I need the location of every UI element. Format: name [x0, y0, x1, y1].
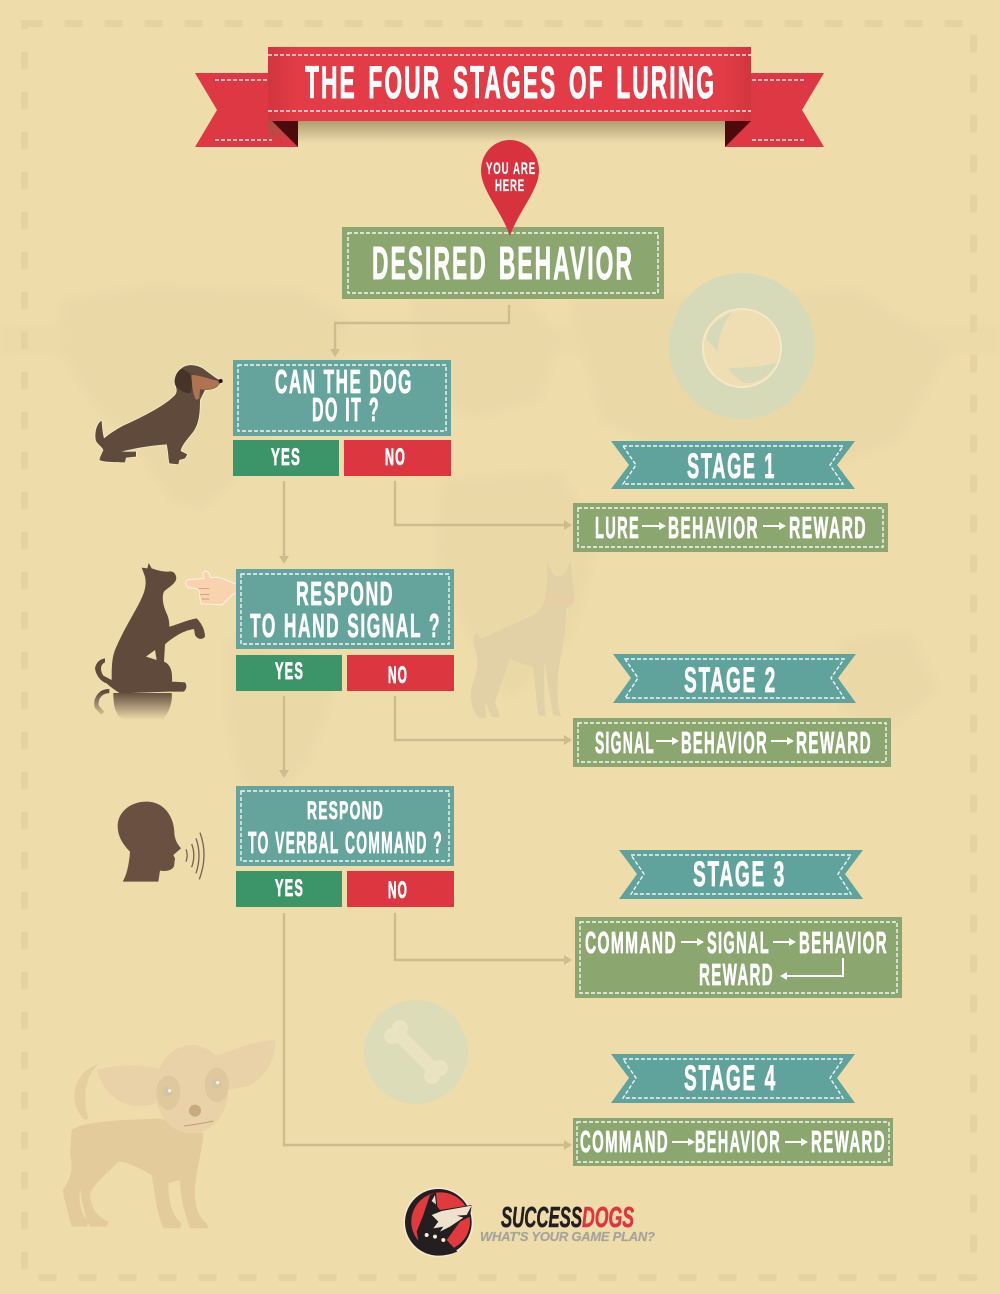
background world map [0, 285, 1000, 800]
yes button 2 [236, 655, 342, 691]
arrow: yes to question 3 [279, 696, 289, 778]
question box 2: RESPOND [296, 575, 394, 612]
logo wordmark: DOGS [582, 1202, 634, 1234]
logo wordmark: SUCCESS [501, 1202, 582, 1234]
icon: speaking head [118, 802, 204, 882]
stage 3 sequence box: BEHAVIOR [799, 925, 888, 960]
arrow: yes to question 2 [279, 481, 289, 564]
desired behavior box: DESIRED BEHAVIOR [372, 237, 634, 289]
question box 1: CAN THE DOG [275, 363, 413, 400]
yes button 3: YES [275, 875, 304, 902]
stage 2 sequence box [573, 718, 891, 767]
stage 3 ribbon [619, 850, 863, 899]
stage 2 sequence box: SIGNAL [595, 725, 655, 760]
question box 3: RESPOND [307, 797, 384, 825]
stage 4 sequence box: BEHAVIOR [695, 1124, 781, 1159]
stage 1 sequence box [573, 503, 888, 552]
location pin: you are here: YOU ARE [486, 159, 536, 178]
background doberman silhouette [471, 561, 575, 718]
question box 2 [236, 569, 454, 649]
arrow: no to stage 2 [395, 696, 572, 745]
stage 3 ribbon: STAGE 3 [693, 855, 786, 894]
logo wordmark [480, 1202, 655, 1244]
stage 3 sequence box: REWARD [699, 957, 774, 992]
stage 1 ribbon: STAGE 1 [687, 447, 776, 486]
no button 3: NO [388, 877, 408, 904]
logo mark: wolf in circle [403, 1187, 473, 1257]
arrow: no to stage 1 [395, 481, 572, 530]
stage 3 sequence box [575, 917, 902, 998]
location pin: you are here: HERE [495, 176, 525, 195]
arrow: yes to stage 4 [284, 913, 572, 1150]
no button 2 [347, 655, 454, 691]
stage 3 sequence box: SIGNAL [707, 925, 770, 960]
stage 4 ribbon: STAGE 4 [684, 1059, 777, 1098]
yes button 2: YES [275, 658, 304, 685]
location pin: you are here [481, 140, 539, 236]
icon: sitting dog [95, 563, 205, 720]
stage 4 sequence box: REWARD [811, 1124, 886, 1159]
question box 1 [233, 360, 451, 436]
stage 2 sequence box: REWARD [796, 725, 872, 760]
stage 2 ribbon: STAGE 2 [684, 661, 777, 700]
no button 2: NO [388, 662, 408, 689]
question box 3 [236, 786, 454, 866]
stage 1 sequence box: LURE [595, 510, 640, 545]
stage 1 sequence box: BEHAVIOR [668, 510, 759, 545]
no button 1 [344, 440, 451, 476]
icon: dachshund [95, 365, 223, 464]
question box 2: TO HAND SIGNAL ? [250, 607, 441, 644]
icon: pointing hand [186, 572, 236, 604]
question box 1: DO IT ? [312, 391, 380, 428]
stage 4 ribbon [611, 1054, 855, 1103]
yes button 1 [233, 440, 339, 476]
stage 4 sequence box [573, 1118, 893, 1166]
no button 3 [347, 871, 454, 907]
logo wordmark: WHAT'S YOUR GAME PLAN? [480, 1229, 655, 1244]
stage 2 sequence box: BEHAVIOR [681, 725, 768, 760]
title ribbon [195, 47, 824, 147]
stage 1 sequence box: REWARD [789, 510, 867, 545]
stage 1 ribbon [611, 441, 855, 489]
arrow: no to stage 3 [395, 913, 572, 965]
yes button 1: YES [271, 444, 301, 471]
background globe circle [669, 273, 815, 419]
stage 2 ribbon [613, 654, 856, 703]
arrow: desired behavior to question 1 [330, 305, 509, 357]
background chihuahua [63, 1040, 275, 1228]
yes button 3 [236, 871, 342, 907]
infographic canvas: TO VERBAL COMMAND ? [248, 825, 443, 860]
desired behavior box [342, 227, 664, 299]
no button 1: NO [385, 444, 406, 471]
background bone circle [364, 1000, 468, 1104]
stage 3 sequence box: COMMAND [585, 925, 677, 960]
stage 4 sequence box: COMMAND [580, 1124, 669, 1159]
